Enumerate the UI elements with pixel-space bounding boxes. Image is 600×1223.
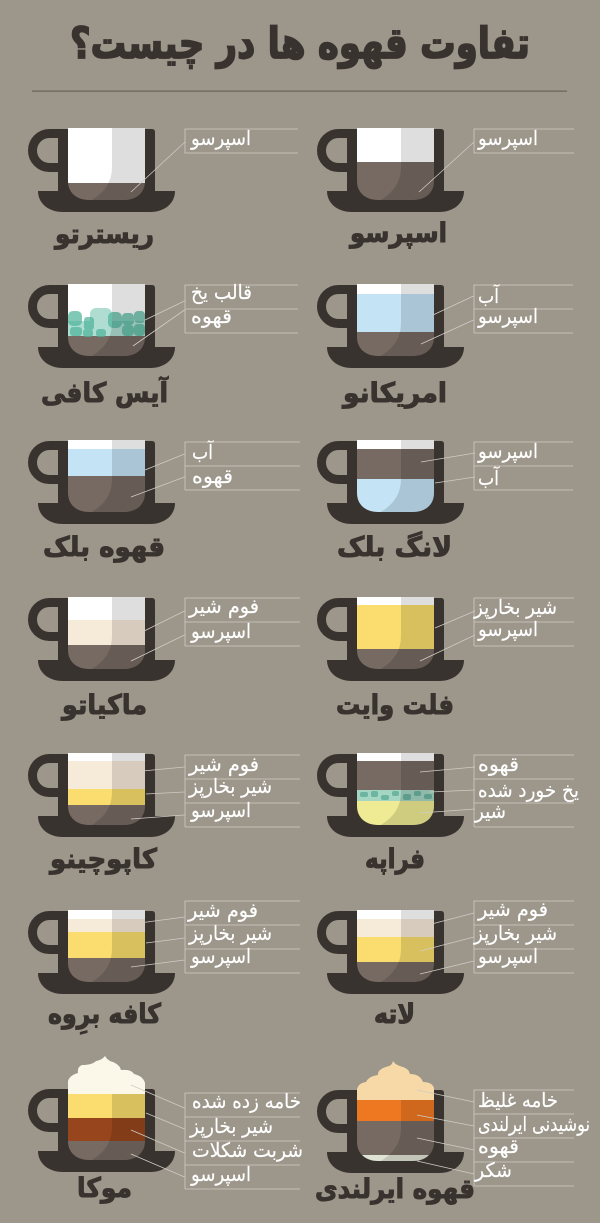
panel: frappe (322, 752, 579, 875)
panel: cafe breve (32, 898, 300, 1034)
labels: americano: اسپرسو (477, 304, 538, 329)
callout lines: macchiato (131, 598, 300, 661)
labels: cappuccino: فوم شیر (188, 752, 259, 776)
panel: black coffee (32, 439, 300, 563)
callout lines: americano (421, 285, 573, 344)
name: black coffee: قهوه بلک (43, 532, 165, 563)
labels: black coffee: قهوه (192, 464, 233, 488)
callout lines: flat white (420, 598, 574, 661)
callout lines: iced coffee (133, 285, 298, 346)
icon: irish coffee cup (322, 1061, 464, 1173)
panel: cappuccino (32, 752, 300, 875)
labels: irish coffee: قهوه (478, 1134, 519, 1158)
icon: macchiato cup (32, 597, 175, 681)
labels: long black: آب (478, 465, 500, 490)
labels: mocha (189, 1089, 303, 1187)
panel: irish coffee (315, 1061, 590, 1205)
callout lines: ristretto (131, 129, 298, 192)
panel: flat white (322, 595, 574, 721)
label: ristretto: اسپرسو (190, 126, 251, 151)
callout lines: irish coffee (417, 1090, 574, 1186)
labels: black coffee: آب (192, 439, 214, 464)
name: cafe breve: کافه برِوه (48, 999, 161, 1034)
labels: frappe: شیر (474, 799, 506, 823)
labels: flat white (473, 595, 557, 642)
labels: frappe: قهوه (478, 752, 519, 776)
labels: macchiato (188, 594, 259, 644)
labels: americano: آب (478, 283, 500, 308)
labels: flat white: شیر بخارپز (473, 595, 557, 620)
labels: cafe breve: شیر بخارپز (188, 921, 272, 946)
labels: latte: اسپرسو (477, 944, 538, 969)
callout lines: latte (420, 901, 574, 974)
name: latte: لاته (374, 999, 415, 1030)
labels: black coffee (192, 439, 233, 488)
name: cappuccino: کاپوچینو (48, 844, 157, 875)
panel: espresso (322, 126, 574, 249)
callout lines: frappe (420, 755, 574, 827)
name: long black: لانگ بلک (337, 531, 452, 563)
labels: irish coffee: خامه غلیظ (478, 1088, 558, 1112)
labels: cafe breve: فوم شیر (187, 898, 258, 922)
panel: ristretto (32, 126, 298, 250)
icon: cappuccino cup (32, 753, 175, 837)
name: americano: امریکانو (341, 378, 447, 409)
labels: cappuccino: اسپرسو (190, 798, 251, 823)
icon: flat white cup (322, 597, 464, 681)
callout lines: mocha (131, 1085, 300, 1189)
labels: frappe (474, 752, 579, 823)
labels: iced coffee: قالب یخ (191, 280, 252, 304)
labels: flat white: اسپرسو (477, 617, 538, 642)
icon: iced coffee cup (32, 284, 175, 368)
labels: cafe breve (187, 898, 272, 969)
name: mocha: موکا (77, 1173, 132, 1204)
labels: cappuccino (188, 752, 272, 823)
icon: frappe cup (322, 753, 464, 837)
labels: cafe breve: اسپرسو (190, 944, 251, 969)
panel: mocha (32, 1056, 303, 1204)
name: irish coffee: قهوه ایرلندی (315, 1174, 475, 1205)
name: macchiato: ماکیاتو (60, 690, 147, 721)
panel: long black (322, 439, 573, 563)
name: espresso: اسپرسو (348, 218, 447, 249)
labels: iced coffee: قهوه (191, 304, 232, 328)
name: iced coffee: آیس کافی (41, 376, 169, 409)
labels: latte (473, 897, 557, 969)
labels: americano (477, 283, 538, 329)
labels: mocha: شیر بخارپز (189, 1114, 273, 1139)
callout lines: cappuccino (131, 755, 300, 827)
icon: ristretto cup (32, 128, 175, 212)
callout lines: long black (421, 442, 573, 490)
panel: latte (322, 897, 574, 1030)
labels: irish coffee (474, 1088, 590, 1182)
name: flat white: فلت وایت (336, 690, 454, 721)
icon: black coffee cup (32, 440, 175, 524)
labels: iced coffee (191, 280, 252, 328)
labels: cappuccino: شیر بخارپز (188, 774, 272, 799)
labels: mocha: اسپرسو (190, 1162, 251, 1187)
panel: iced coffee (32, 280, 298, 409)
labels: long black: اسپرسو (477, 439, 538, 464)
labels: macchiato: فوم شیر (188, 594, 259, 618)
labels: frappe: یخ خورد شده (478, 778, 579, 802)
labels: mocha: شربت شکلات (192, 1138, 303, 1162)
labels: irish coffee: شکر (474, 1158, 512, 1182)
labels: latte: فوم شیر (477, 897, 548, 921)
icon: espresso cup (322, 128, 464, 212)
labels: macchiato: اسپرسو (190, 619, 251, 644)
panel: macchiato (32, 594, 300, 721)
icon: americano cup (322, 284, 464, 368)
icon: long black cup (322, 440, 464, 524)
labels: long black (477, 439, 538, 490)
label: espresso: اسپرسو (477, 126, 538, 151)
icon: mocha cup (32, 1056, 175, 1172)
icon: cafe breve cup (32, 910, 175, 994)
icon: latte cup (322, 910, 464, 994)
name: ristretto: ریسترتو (53, 219, 154, 250)
labels: mocha: خامه زده شده (192, 1089, 301, 1113)
callout lines: black coffee (131, 442, 300, 497)
callout lines: espresso (419, 129, 574, 192)
panel: americano (322, 283, 573, 409)
callout lines: cafe breve (131, 901, 300, 973)
name: frappe: فراپه (365, 844, 425, 875)
labels: latte: شیر بخارپز (473, 921, 557, 946)
